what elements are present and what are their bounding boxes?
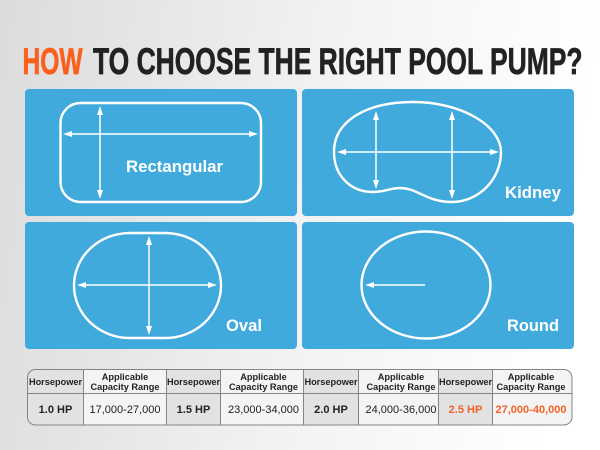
column 2.0 HP [304,377,358,416]
column 2.5 HP: Horsepower [439,377,492,387]
panel: oval [25,222,297,349]
column 27,000-40,000: Applicable [508,372,554,382]
outline: rectangular pool [60,103,261,202]
title: HOW [22,41,83,82]
outline: round pool [362,232,490,338]
column 2.0 HP: Horsepower [304,377,358,387]
label: rectangular: Rectangular [126,157,223,176]
column 1.5 HP: Horsepower [167,377,220,387]
column 17,000-27,000: Capacity Range [91,382,159,392]
arrow: round radius [365,282,425,288]
arrow: oval width [146,236,152,335]
column 2.5 HP: 2.5 HP [449,404,482,416]
column 1.5 HP [167,377,220,416]
column 24,000-36,000: Applicable [378,372,424,382]
panel: kidney [302,89,574,216]
outline: kidney pool [334,102,501,202]
column 1.0 HP: Horsepower [29,377,82,387]
column 2.0 HP: 2.0 HP [314,404,348,416]
column 23,000-34,000: Applicable [240,372,287,382]
capacity table [27,369,572,425]
column 2.5 HP [439,377,492,416]
column 1.0 HP: 1.0 HP [39,404,72,416]
outline: oval pool [74,233,221,338]
label: oval: Oval [226,316,262,335]
panel: round [302,222,574,349]
label: round: Round [507,316,559,335]
column 24,000-36,000: 24,000-36,000 [366,404,436,416]
column 24,000-36,000 [366,372,436,416]
column 23,000-34,000 [228,372,299,416]
panel: rectangular [25,89,297,216]
column 17,000-27,000: Applicable [102,372,148,382]
column 27,000-40,000: 27,000-40,000 [496,404,566,416]
label: kidney: Kidney [505,183,562,202]
column 23,000-34,000: 23,000-34,000 [228,404,299,416]
column 1.0 HP [29,377,82,416]
arrow: oval length [77,282,217,288]
column 17,000-27,000: 17,000-27,000 [90,404,160,416]
column 27,000-40,000 [496,372,566,416]
arrow: kidney length [337,149,499,155]
column 24,000-36,000: Capacity Range [367,382,435,392]
arrow: rectangular length [63,131,258,137]
column 23,000-34,000: Capacity Range [229,382,298,392]
arrow: rectangular width [97,106,103,199]
arrow: kidney right width [449,111,455,199]
column 17,000-27,000 [90,372,160,416]
column 1.5 HP: 1.5 HP [177,404,210,416]
column 27,000-40,000: Capacity Range [497,382,565,392]
arrow: kidney left width [373,111,379,189]
